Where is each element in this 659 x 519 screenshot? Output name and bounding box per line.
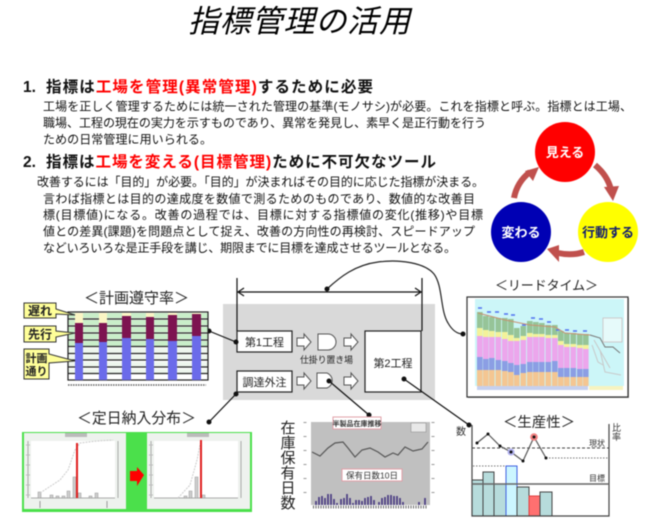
period strip — [477, 386, 588, 390]
axis labels: 数 — [456, 425, 466, 438]
value tags above bars — [478, 308, 587, 331]
axis labels: 現状 — [589, 438, 605, 448]
chart: before — [24, 433, 126, 509]
panel: schedule adherence — [24, 290, 208, 385]
axis labels — [456, 422, 621, 483]
connector lines — [206, 261, 472, 428]
legend — [603, 318, 622, 342]
circle: 変わる: 変わる — [501, 225, 541, 240]
cycle diagram — [491, 122, 638, 262]
body: section 1: ための日常管理に用いられる。 — [43, 132, 212, 146]
green segments — [477, 312, 589, 345]
heading: section 2: 指標は工場を変える(目標管理)ために不可欠なツール — [46, 152, 436, 171]
heading: section 1: 指標は工場を管理(異常管理)するために必要 — [46, 77, 373, 96]
lead time bracket — [237, 278, 422, 331]
heading: inventory days: 数 — [280, 495, 296, 512]
callout: 計画通り: 通り — [26, 364, 48, 378]
body: section 1 — [43, 98, 632, 146]
green backing panel — [22, 432, 252, 512]
panel: inventory days — [280, 417, 433, 512]
heading: inventory days: 有 — [280, 465, 296, 482]
label: 仕掛り置き場: 仕掛り置き場 — [300, 354, 353, 365]
axis labels: 目標 — [589, 473, 605, 483]
box: 調達外注: 調達外注 — [242, 376, 286, 389]
axis tick marks — [68, 384, 206, 386]
trend lines — [478, 313, 590, 335]
circle: 行動する: 行動する — [582, 225, 634, 240]
body: section 1: 職場、工程の現在の実力を示すものであり、異常を発見し、素早く是正行動を行う — [43, 115, 486, 130]
body: section 2: 言わば指標とは目的の達成度を数値で測るためのものであり、数値的な改善目 — [43, 191, 475, 206]
callout: 計画通り: 計画 — [26, 351, 48, 365]
heading: section 1: 1. — [23, 79, 36, 96]
box: 第2工程 — [365, 331, 421, 392]
callout: 先行: 先行 — [28, 326, 52, 342]
bars — [75, 313, 201, 380]
panel: process flow — [223, 278, 435, 400]
cycle arrows — [514, 165, 619, 262]
circle: 変わる — [491, 202, 551, 262]
blue segments — [477, 357, 589, 377]
panel: on-time delivery distribution — [22, 410, 252, 512]
heading: inventory days: 在 — [280, 420, 296, 437]
panel: lead time — [467, 278, 629, 398]
orange segments — [477, 370, 589, 386]
stacked bar chart — [68, 312, 208, 385]
box: 調達外注 — [237, 371, 292, 392]
body: section 2: 改善するには「目的」が必要。「目的」が決まればその目的に応じた指標が決まる。 — [37, 174, 484, 189]
heading: section 2: 2. — [23, 154, 36, 171]
heading: schedule adherence: ＜計画遵守率＞ — [84, 290, 189, 307]
axes and target lines — [472, 424, 609, 516]
heading: lead time: ＜リードタイム＞ — [495, 278, 598, 293]
body: section 2: などいろいろな是正手段を講じ、期限までに目標を達成させるツールとなる。 — [43, 240, 456, 255]
frame shadow — [468, 298, 629, 398]
axis labels: 率 — [612, 432, 621, 442]
axis labels: 比 — [612, 422, 621, 433]
heading: inventory days: 庫 — [280, 435, 296, 452]
chart title: 半製品在庫推移 — [332, 419, 382, 428]
flow arrows — [297, 334, 358, 389]
pink segments — [477, 336, 589, 369]
circle: 見える: 見える — [546, 145, 584, 160]
heading: inventory days: 保 — [280, 450, 296, 467]
line series — [476, 432, 548, 462]
body: section 2: 標(目標値)になる。改善の過程では、目標に対する指標値の変化(推移)や目標 — [43, 207, 483, 222]
box: 第1工程: 第1工程 — [245, 335, 284, 349]
bars — [472, 466, 552, 516]
box: 第1工程 — [237, 331, 292, 352]
legend — [411, 423, 426, 432]
callout: 計画通り — [24, 349, 75, 379]
stacked bar chart — [475, 299, 624, 390]
label: 保有日数10日: 保有日数10日 — [346, 470, 398, 480]
circle: 見える — [535, 122, 595, 182]
heading: delivery distribution: ＜定日納入分布＞ — [77, 410, 196, 427]
title: 指標管理の活用 — [188, 4, 413, 39]
body: section 1: 工場を正しく管理するためには統一された管理の基準(モノサシ)が必要。これを指標と呼ぶ。指標とは工場、 — [43, 98, 632, 114]
yellow segments — [477, 328, 589, 349]
circle: 行動する — [578, 202, 638, 262]
arrow: improvement — [130, 467, 144, 486]
heading: inventory days — [280, 420, 296, 512]
combo chart — [305, 417, 433, 507]
callout: 先行 — [24, 326, 75, 342]
frame — [467, 297, 628, 397]
text block: section 2 — [23, 152, 484, 255]
body: section 2: 値との差異(課題)を問題点として捉え、改善の方向性の再検討、スピードアップ — [43, 224, 475, 238]
callout: 遅れ: 遅れ — [28, 303, 52, 318]
panel: productivity — [456, 414, 621, 516]
chart: after — [147, 433, 250, 509]
heading: productivity: ＜生産性＞ — [503, 414, 575, 431]
heading: inventory days: 日 — [280, 480, 296, 497]
callout: 遅れ — [24, 303, 75, 318]
body: section 2 — [37, 174, 484, 255]
text block: section 1 — [23, 77, 632, 146]
box: 第2工程: 第2工程 — [373, 356, 413, 370]
